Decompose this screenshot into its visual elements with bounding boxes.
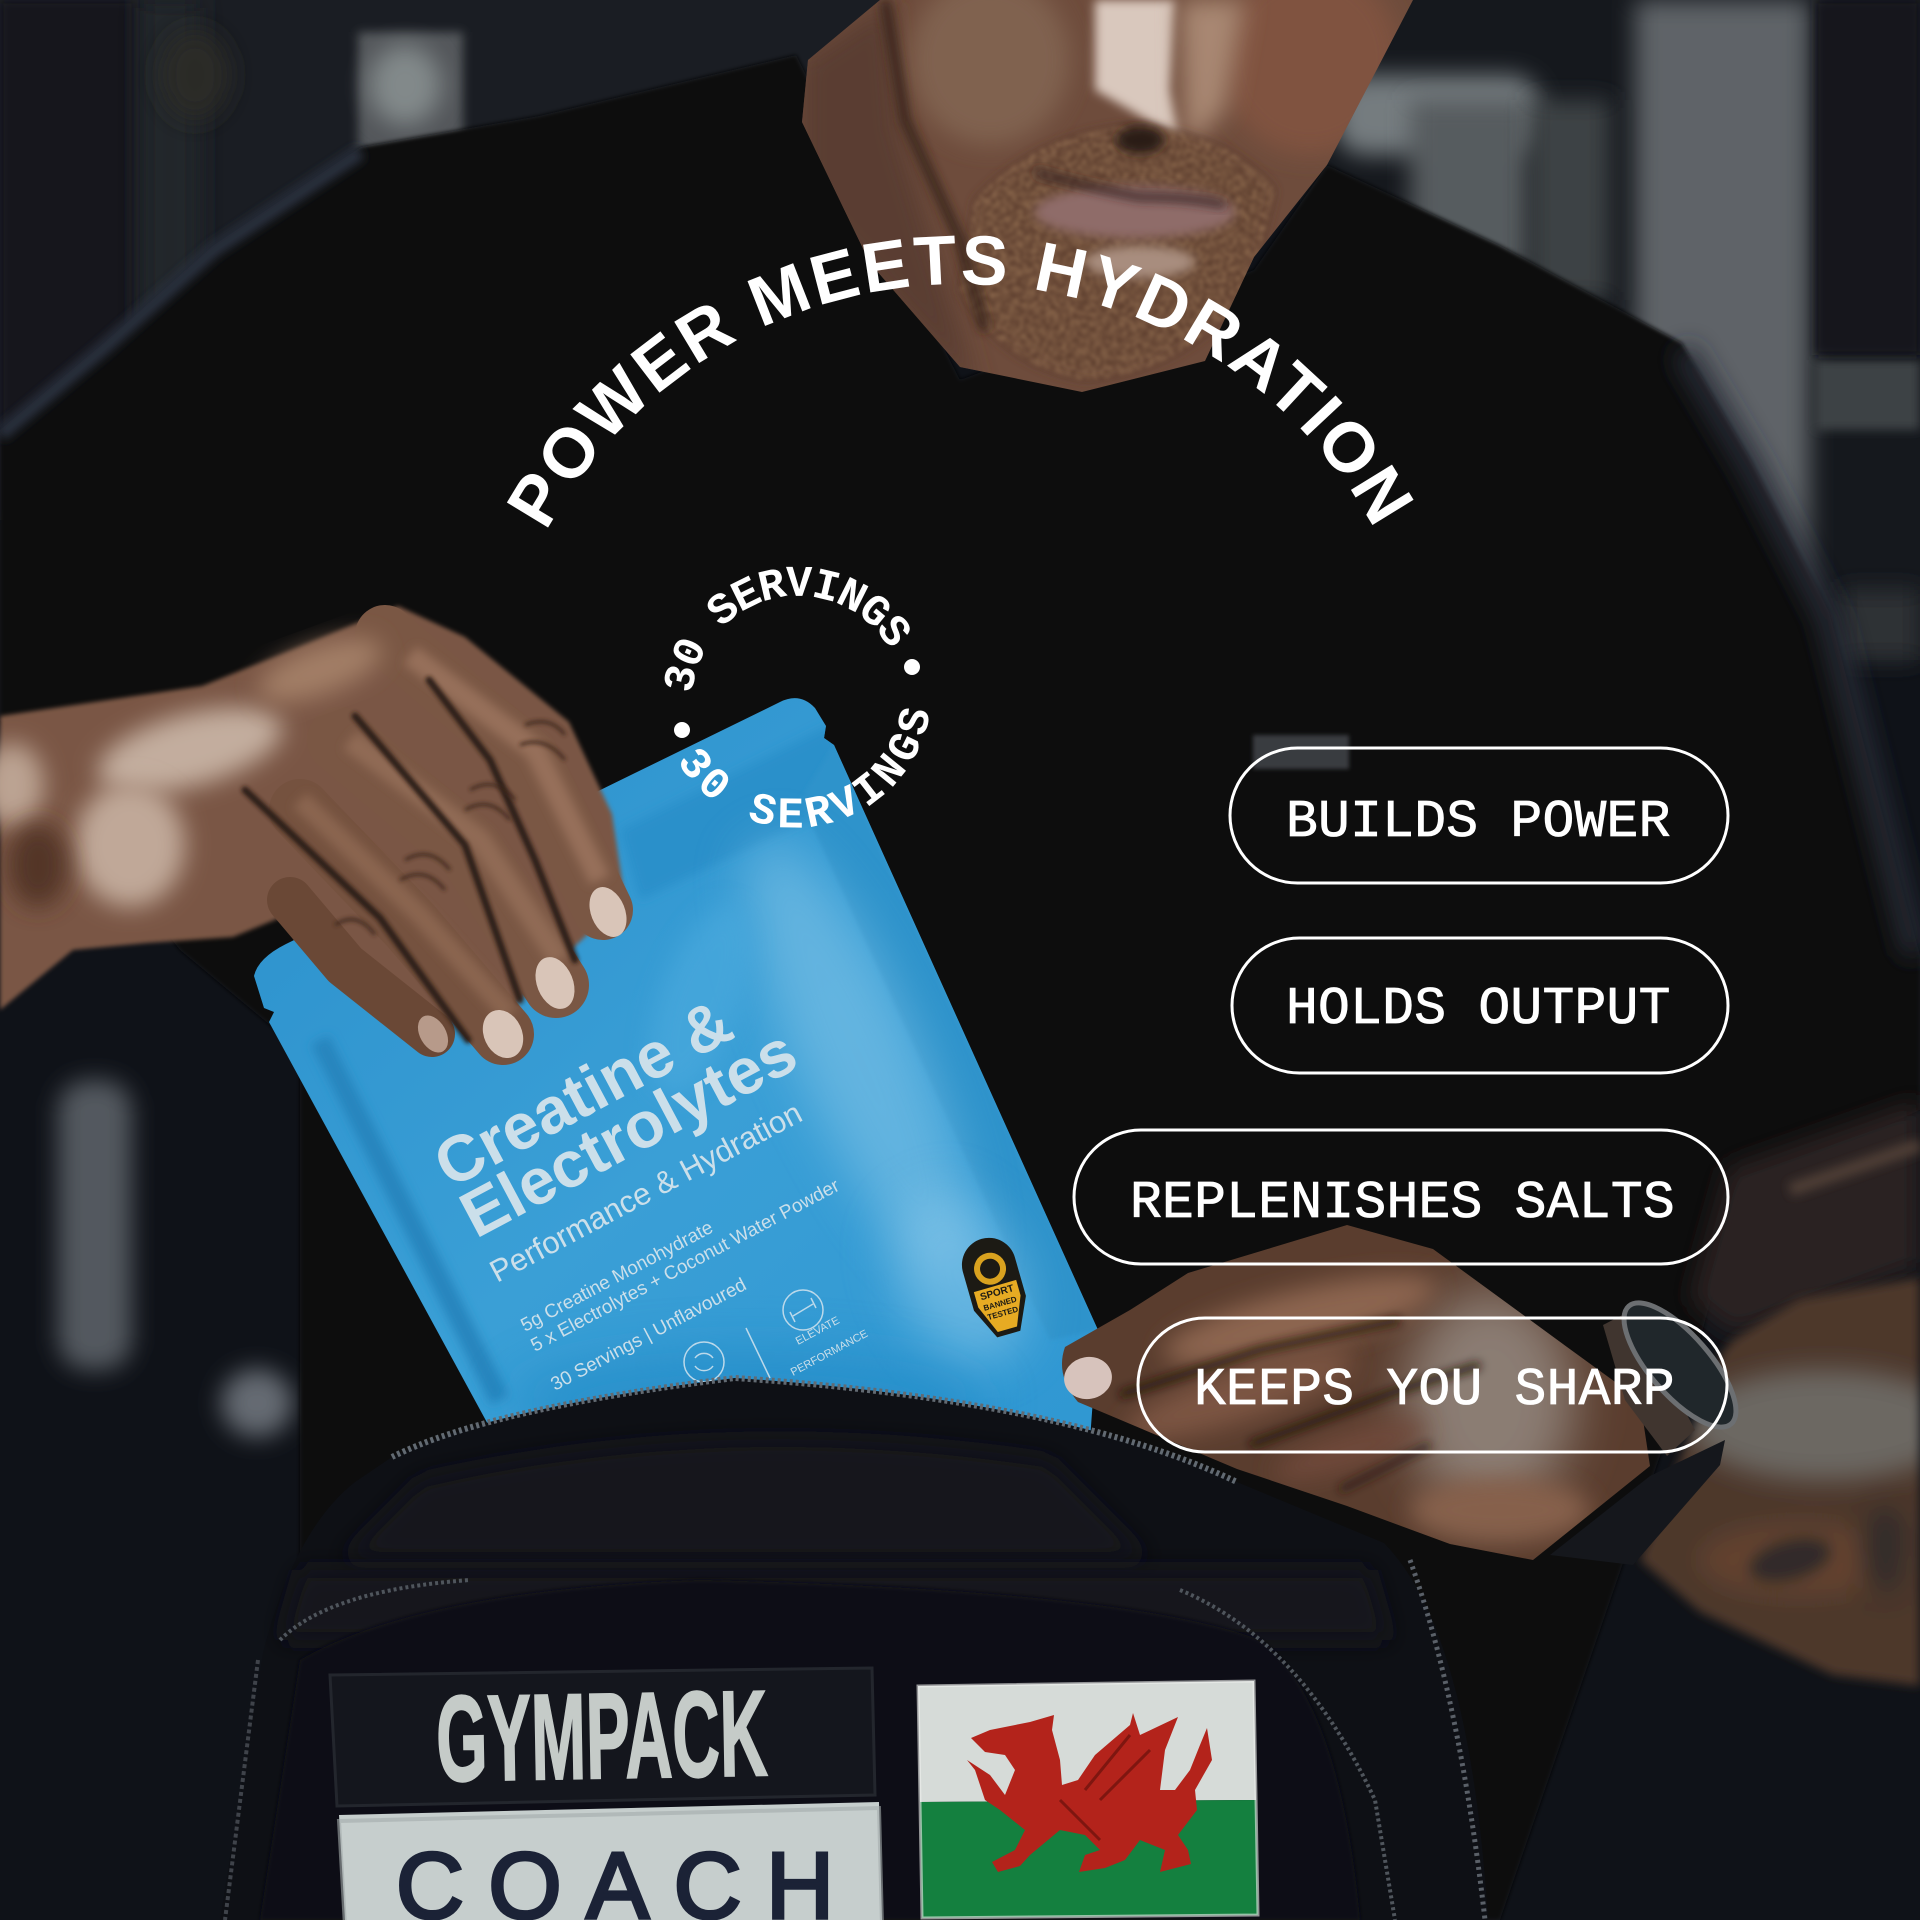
pill: builds power: BUILDS POWER xyxy=(1286,792,1671,852)
red dragon xyxy=(967,1713,1212,1872)
pouch label: product name: Performance & Hydration xyxy=(484,1095,808,1289)
knuckle creases xyxy=(335,722,565,935)
pouch label: product name: 5g Creatine Monohydrate xyxy=(517,1217,717,1336)
pouch label: product name xyxy=(422,984,870,1395)
informed sport badge: SPORT xyxy=(979,1283,1015,1303)
circular badge: 30 servings xyxy=(664,566,929,828)
pill: holds output: HOLDS OUTPUT xyxy=(1286,979,1671,1039)
informed sport badge: TESTED xyxy=(986,1305,1019,1322)
hand silhouette xyxy=(0,606,625,1034)
fingernails xyxy=(412,882,634,1065)
backpack xyxy=(220,1378,1488,1920)
pouch label: product name: Electrolytes xyxy=(448,1014,808,1251)
right hand xyxy=(1050,1220,1670,1570)
pouch label: product name: Creatine & xyxy=(422,984,744,1201)
patch: Welsh flag xyxy=(918,1681,1258,1918)
patch: GYMPACK: GYMPACK xyxy=(435,1665,768,1807)
pill: replenishes salts xyxy=(1074,1130,1728,1264)
pouch icons xyxy=(684,1290,823,1382)
face: neck, chin, beard and nose xyxy=(780,0,1440,400)
pill: keeps you sharp: KEEPS YOU SHARP xyxy=(1194,1360,1675,1420)
wristwatch xyxy=(1550,1286,1754,1565)
patch: GYMPACK xyxy=(330,1665,875,1807)
title: curved headline: POWER MEETS HYDRATION xyxy=(507,236,1414,528)
informed sport badge xyxy=(956,1231,1035,1342)
thumbnail xyxy=(1061,1353,1115,1403)
shirt chest logo xyxy=(1253,735,1349,769)
pouch label: product name: ELEVATE xyxy=(794,1315,842,1348)
pouch label: product name: PERFORMANCE xyxy=(789,1328,870,1379)
pill: replenishes salts: REPLENISHES SALTS xyxy=(1130,1173,1675,1233)
circular badge: 30 servings: 30 SERVINGS xyxy=(664,566,910,690)
lit areas on hand xyxy=(0,625,600,1015)
circular badge: 30 servings: 30 SERVINGS xyxy=(681,708,929,828)
left hand gripping pouch xyxy=(0,606,634,1065)
backpack zippers xyxy=(225,1378,1485,1920)
informed sport badge: BANNED xyxy=(982,1295,1018,1313)
pouch label: product name: 5 x Electrolytes + Coconut Water Powder xyxy=(527,1175,844,1356)
pouch label: product name: 30 Servings | Unflavoured xyxy=(547,1274,750,1395)
patch: COACH xyxy=(339,1802,882,1920)
pill: holds output xyxy=(1232,938,1728,1073)
pill: keeps you sharp xyxy=(1138,1318,1727,1452)
pill: builds power xyxy=(1230,748,1728,883)
pouch xyxy=(240,690,1120,1450)
gaps between fingers xyxy=(245,680,575,1040)
right forearm with tattoos xyxy=(1640,1100,1920,1690)
